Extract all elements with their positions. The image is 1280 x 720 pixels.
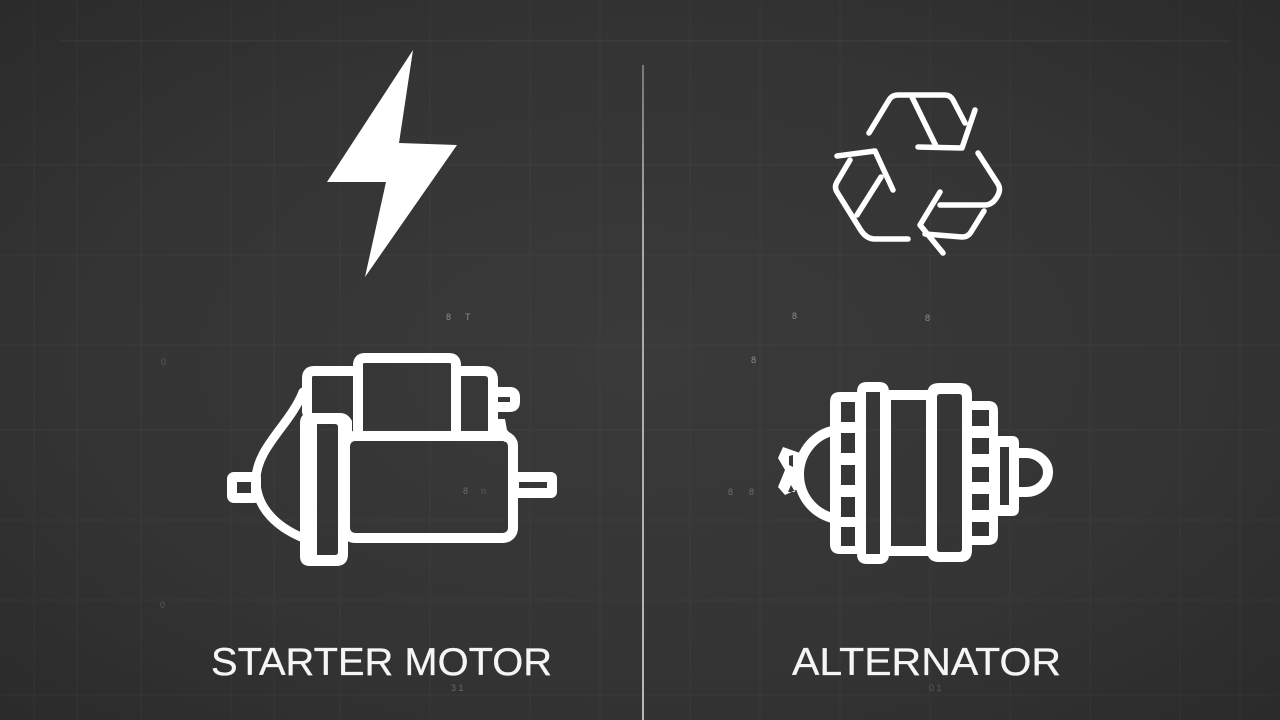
faint annotation marks: 8	[925, 313, 930, 323]
label: alternator: ALTERNATOR	[792, 641, 1061, 684]
faint annotation marks: 8	[792, 311, 797, 321]
shoulder notch	[490, 419, 518, 442]
faint annotation marks: 8	[463, 486, 468, 496]
terminal	[498, 392, 515, 407]
band two	[927, 383, 972, 562]
faint annotation marks: 0 1	[929, 683, 942, 693]
icon: starter motor	[232, 358, 552, 566]
faint annotation marks: T	[465, 312, 471, 322]
icon: alternator	[778, 382, 1048, 564]
flange	[300, 413, 352, 566]
faint annotation marks: 8	[751, 355, 756, 365]
label: starter motor: STARTER MOTOR	[211, 641, 552, 684]
main body	[345, 436, 513, 538]
faint annotation marks: 8	[728, 487, 733, 497]
left fin block	[830, 392, 860, 554]
right housing	[456, 371, 493, 434]
faint annotation marks: 8	[446, 312, 451, 322]
faint annotation marks: 8	[749, 487, 754, 497]
band one	[857, 382, 889, 564]
nose cone	[256, 392, 303, 537]
end dome	[799, 431, 832, 518]
back housing	[307, 371, 358, 412]
center core	[885, 390, 932, 556]
icon: recycle arrows	[836, 95, 1000, 253]
right shaft	[514, 477, 552, 493]
faint annotation marks: n	[481, 486, 486, 496]
right fin block	[968, 401, 998, 545]
icon: lightning bolt	[327, 50, 457, 277]
faint annotation marks: 3 1	[451, 683, 464, 693]
faint annotation marks	[160, 311, 942, 693]
faint annotation marks: 0	[160, 600, 165, 610]
left shaft	[232, 477, 256, 498]
faint annotation marks: 0	[161, 357, 166, 367]
end cap	[1019, 453, 1048, 492]
divider	[642, 65, 644, 720]
bow tie	[778, 447, 800, 495]
solenoid	[358, 358, 456, 432]
right collar	[994, 436, 1019, 516]
